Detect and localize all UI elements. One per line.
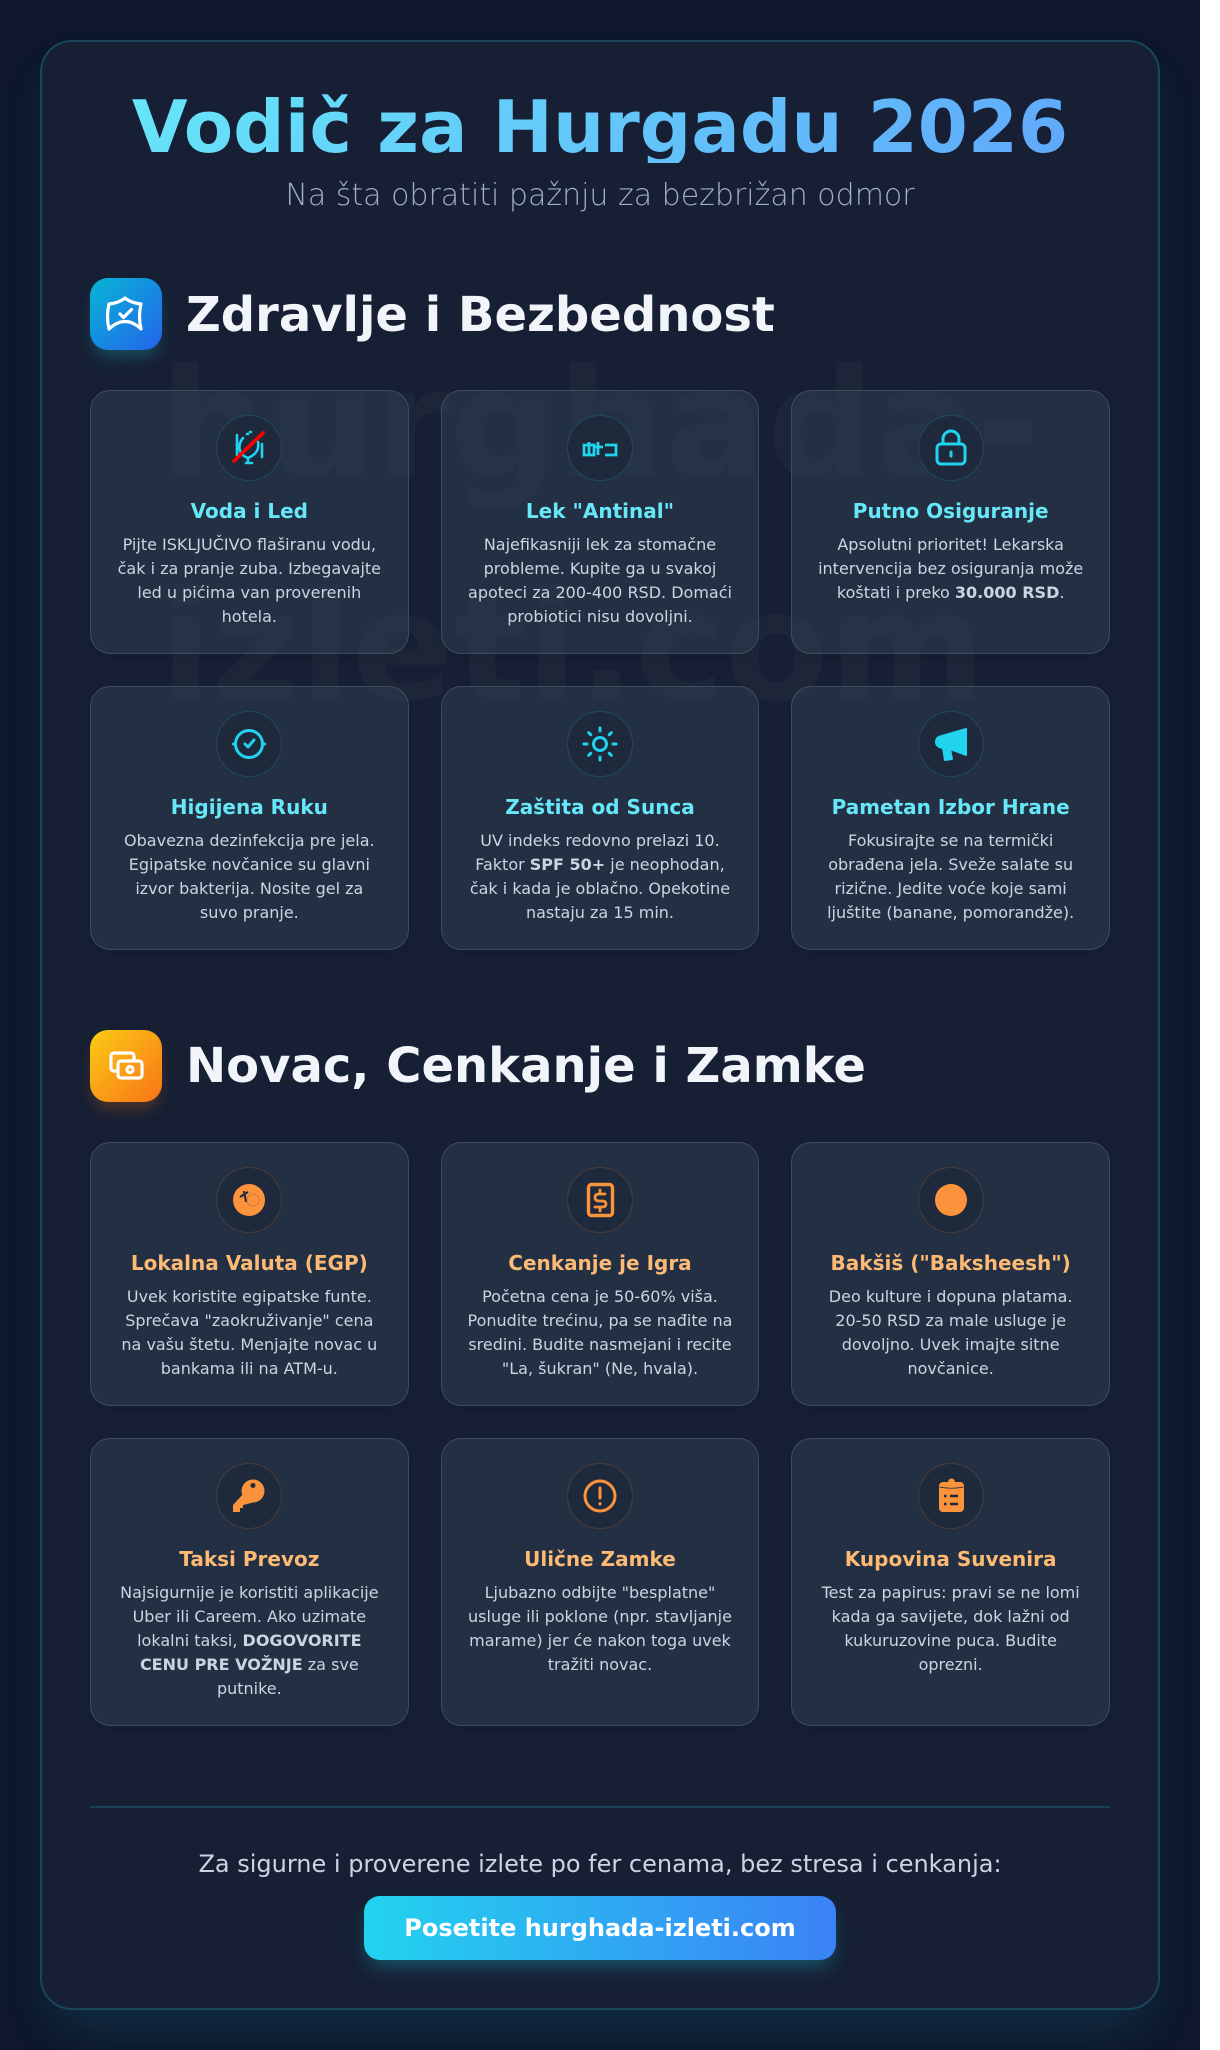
card text: intervencija bez osiguranja može	[818, 559, 1083, 578]
card text	[121, 1287, 377, 1378]
card title: Higijena Ruku	[171, 795, 328, 819]
icon: price tag with dollar	[567, 1167, 633, 1233]
icon: clipboard checklist	[918, 1463, 984, 1529]
card text: Početna cena je 50-60% viša.	[482, 1287, 718, 1306]
heading: money and traps: Novac, Cenkanje i Zamke	[186, 1038, 866, 1094]
card text: Faktor SPF 50+ je neophodan,	[475, 855, 725, 874]
icon: megaphone	[918, 711, 984, 777]
card text: usluge ili poklone (npr. stavljanje	[468, 1607, 732, 1626]
card text: Egipatske novčanice su glavni	[129, 855, 370, 874]
card text: oprezni.	[919, 1655, 983, 1674]
card text: Deo kulture i dopuna platama.	[829, 1287, 1073, 1306]
footer call to action text: Za sigurne i proverene izlete po fer cenama, bez stresa i cenkanja:	[198, 1850, 1002, 1878]
card text: sredini. Budite nasmejani i recite	[468, 1335, 732, 1354]
card text	[827, 831, 1074, 922]
card text	[120, 1583, 379, 1698]
card text: Uvek koristite egipatske funte.	[127, 1287, 372, 1306]
card: bargaining	[441, 1142, 759, 1406]
icon: crossed water	[216, 415, 282, 481]
card text: obrađena jela. Sveže salate su	[828, 855, 1073, 874]
card text: CENU PRE VOŽNJE za sve	[140, 1655, 359, 1674]
subtitle: Na šta obratiti pažnju za bezbrižan odmor	[285, 178, 915, 213]
card text: Uber ili Careem. Ako uzimate	[133, 1607, 366, 1626]
icon: key	[216, 1463, 282, 1529]
card text: čak i za pranje zuba. Izbegavajte	[118, 559, 381, 578]
card text: apoteci za 200-400 RSD. Domaći	[468, 583, 732, 602]
card: travel insurance	[791, 390, 1110, 654]
card: hand hygiene	[90, 686, 409, 950]
card: sun protection	[441, 686, 759, 950]
card: water and ice	[90, 390, 409, 654]
card text: bankama ili na ATM-u.	[161, 1359, 338, 1378]
card text: Fokusirajte se na termički	[848, 831, 1053, 850]
card text: ljuštite (banane, pomorandže).	[827, 903, 1074, 922]
icon: alert circle	[567, 1463, 633, 1529]
card text: suvo pranje.	[200, 903, 299, 922]
card text: dovoljno. Uvek imajte sitne	[842, 1335, 1060, 1354]
icon: banknotes section badge	[90, 1030, 162, 1102]
card text: kukuruzovine puca. Budite	[844, 1631, 1057, 1650]
card text: Sprečava "zaokruživanje" cena	[125, 1311, 373, 1330]
card text: probiotici nisu dovoljni.	[507, 607, 693, 626]
card title: Lokalna Valuta (EGP)	[131, 1251, 368, 1275]
card text	[468, 535, 732, 626]
card title: Ulične Zamke	[524, 1547, 676, 1571]
card title: Bakšiš ("Baksheesh")	[831, 1251, 1071, 1275]
card text: rizične. Jedite voće koje sami	[835, 879, 1067, 898]
card: souvenir shopping	[791, 1438, 1110, 1726]
call to action button: Posetite hurghada-izleti.com	[404, 1914, 796, 1942]
icon: padlock	[918, 415, 984, 481]
card text: probleme. Kupite ga u svakoj	[484, 559, 716, 578]
card text: "La, šukran" (Ne, hvala).	[502, 1359, 698, 1378]
card title: Cenkanje je Igra	[508, 1251, 692, 1275]
icon: pill strip	[567, 415, 633, 481]
call to action button	[364, 1896, 836, 1960]
card title: Voda i Led	[191, 499, 308, 523]
card text: Pijte ISKLJUČIVO flaširanu vodu,	[123, 535, 376, 554]
card text: koštati i preko 30.000 RSD.	[837, 583, 1064, 602]
heading: health and safety: Zdravlje i Bezbednost	[186, 287, 775, 343]
card text: novčanice.	[908, 1359, 994, 1378]
card text: lokalni taksi, DOGOVORITE	[137, 1631, 362, 1650]
card text: Obavezna dezinfekcija pre jela.	[124, 831, 375, 850]
card: local currency	[90, 1142, 409, 1406]
card text: Ponudite trećinu, pa se nađite na	[467, 1311, 732, 1330]
card title: Zaštita od Sunca	[505, 795, 695, 819]
card text: UV indeks redovno prelazi 10.	[480, 831, 720, 850]
card text: tražiti novac.	[548, 1655, 652, 1674]
card title: Lek "Antinal"	[526, 499, 674, 523]
card text	[468, 1583, 732, 1674]
card text: Najefikasniji lek za stomačne	[484, 535, 716, 554]
card text: čak i kada je oblačno. Opekotine	[470, 879, 730, 898]
card text: kada ga savijete, dok lažni od	[832, 1607, 1070, 1626]
card text: izvor bakterija. Nosite gel za	[135, 879, 363, 898]
card text: na vašu štetu. Menjajte novac u	[121, 1335, 377, 1354]
card text	[470, 831, 730, 922]
card text: putnike.	[217, 1679, 282, 1698]
card title: Putno Osiguranje	[853, 499, 1049, 523]
card text	[818, 535, 1083, 602]
icon: sun	[567, 711, 633, 777]
card title: Taksi Prevoz	[179, 1547, 319, 1571]
card text: hotela.	[222, 607, 277, 626]
card: antinal medicine	[441, 390, 759, 654]
title: Vodič za Hurgadu 2026	[132, 85, 1068, 169]
card text: Apsolutni prioritet! Lekarska	[837, 535, 1064, 554]
card text	[822, 1583, 1080, 1674]
card text	[467, 1287, 732, 1378]
icon: shield check section badge	[90, 278, 162, 350]
icon: filled coin	[918, 1167, 984, 1233]
card: street traps	[441, 1438, 759, 1726]
watermark line 1: hurghada-	[160, 336, 1040, 512]
card text: Test za papirus: pravi se ne lomi	[822, 1583, 1080, 1602]
card text: Ljubazno odbijte "besplatne"	[485, 1583, 715, 1602]
card text: marame) jer će nakon toga uvek	[469, 1631, 731, 1650]
card text: Najsigurnije je koristiti aplikacije	[120, 1583, 379, 1602]
icon: check circle	[216, 711, 282, 777]
card text	[829, 1287, 1073, 1378]
card: smart food choice	[791, 686, 1110, 950]
card: tipping	[791, 1142, 1110, 1406]
card text: 20-50 RSD za male usluge je	[835, 1311, 1066, 1330]
card text	[118, 534, 381, 626]
card title: Pametan Izbor Hrane	[832, 795, 1070, 819]
icon: currency coin	[216, 1167, 282, 1233]
watermark line 2: izleti.com	[160, 559, 986, 735]
card text	[124, 831, 375, 922]
card title: Kupovina Suvenira	[845, 1547, 1057, 1571]
card text: nastaju za 15 min.	[526, 903, 674, 922]
card text: led u pićima van proverenih	[137, 583, 361, 602]
card: taxi transport	[90, 1438, 409, 1726]
